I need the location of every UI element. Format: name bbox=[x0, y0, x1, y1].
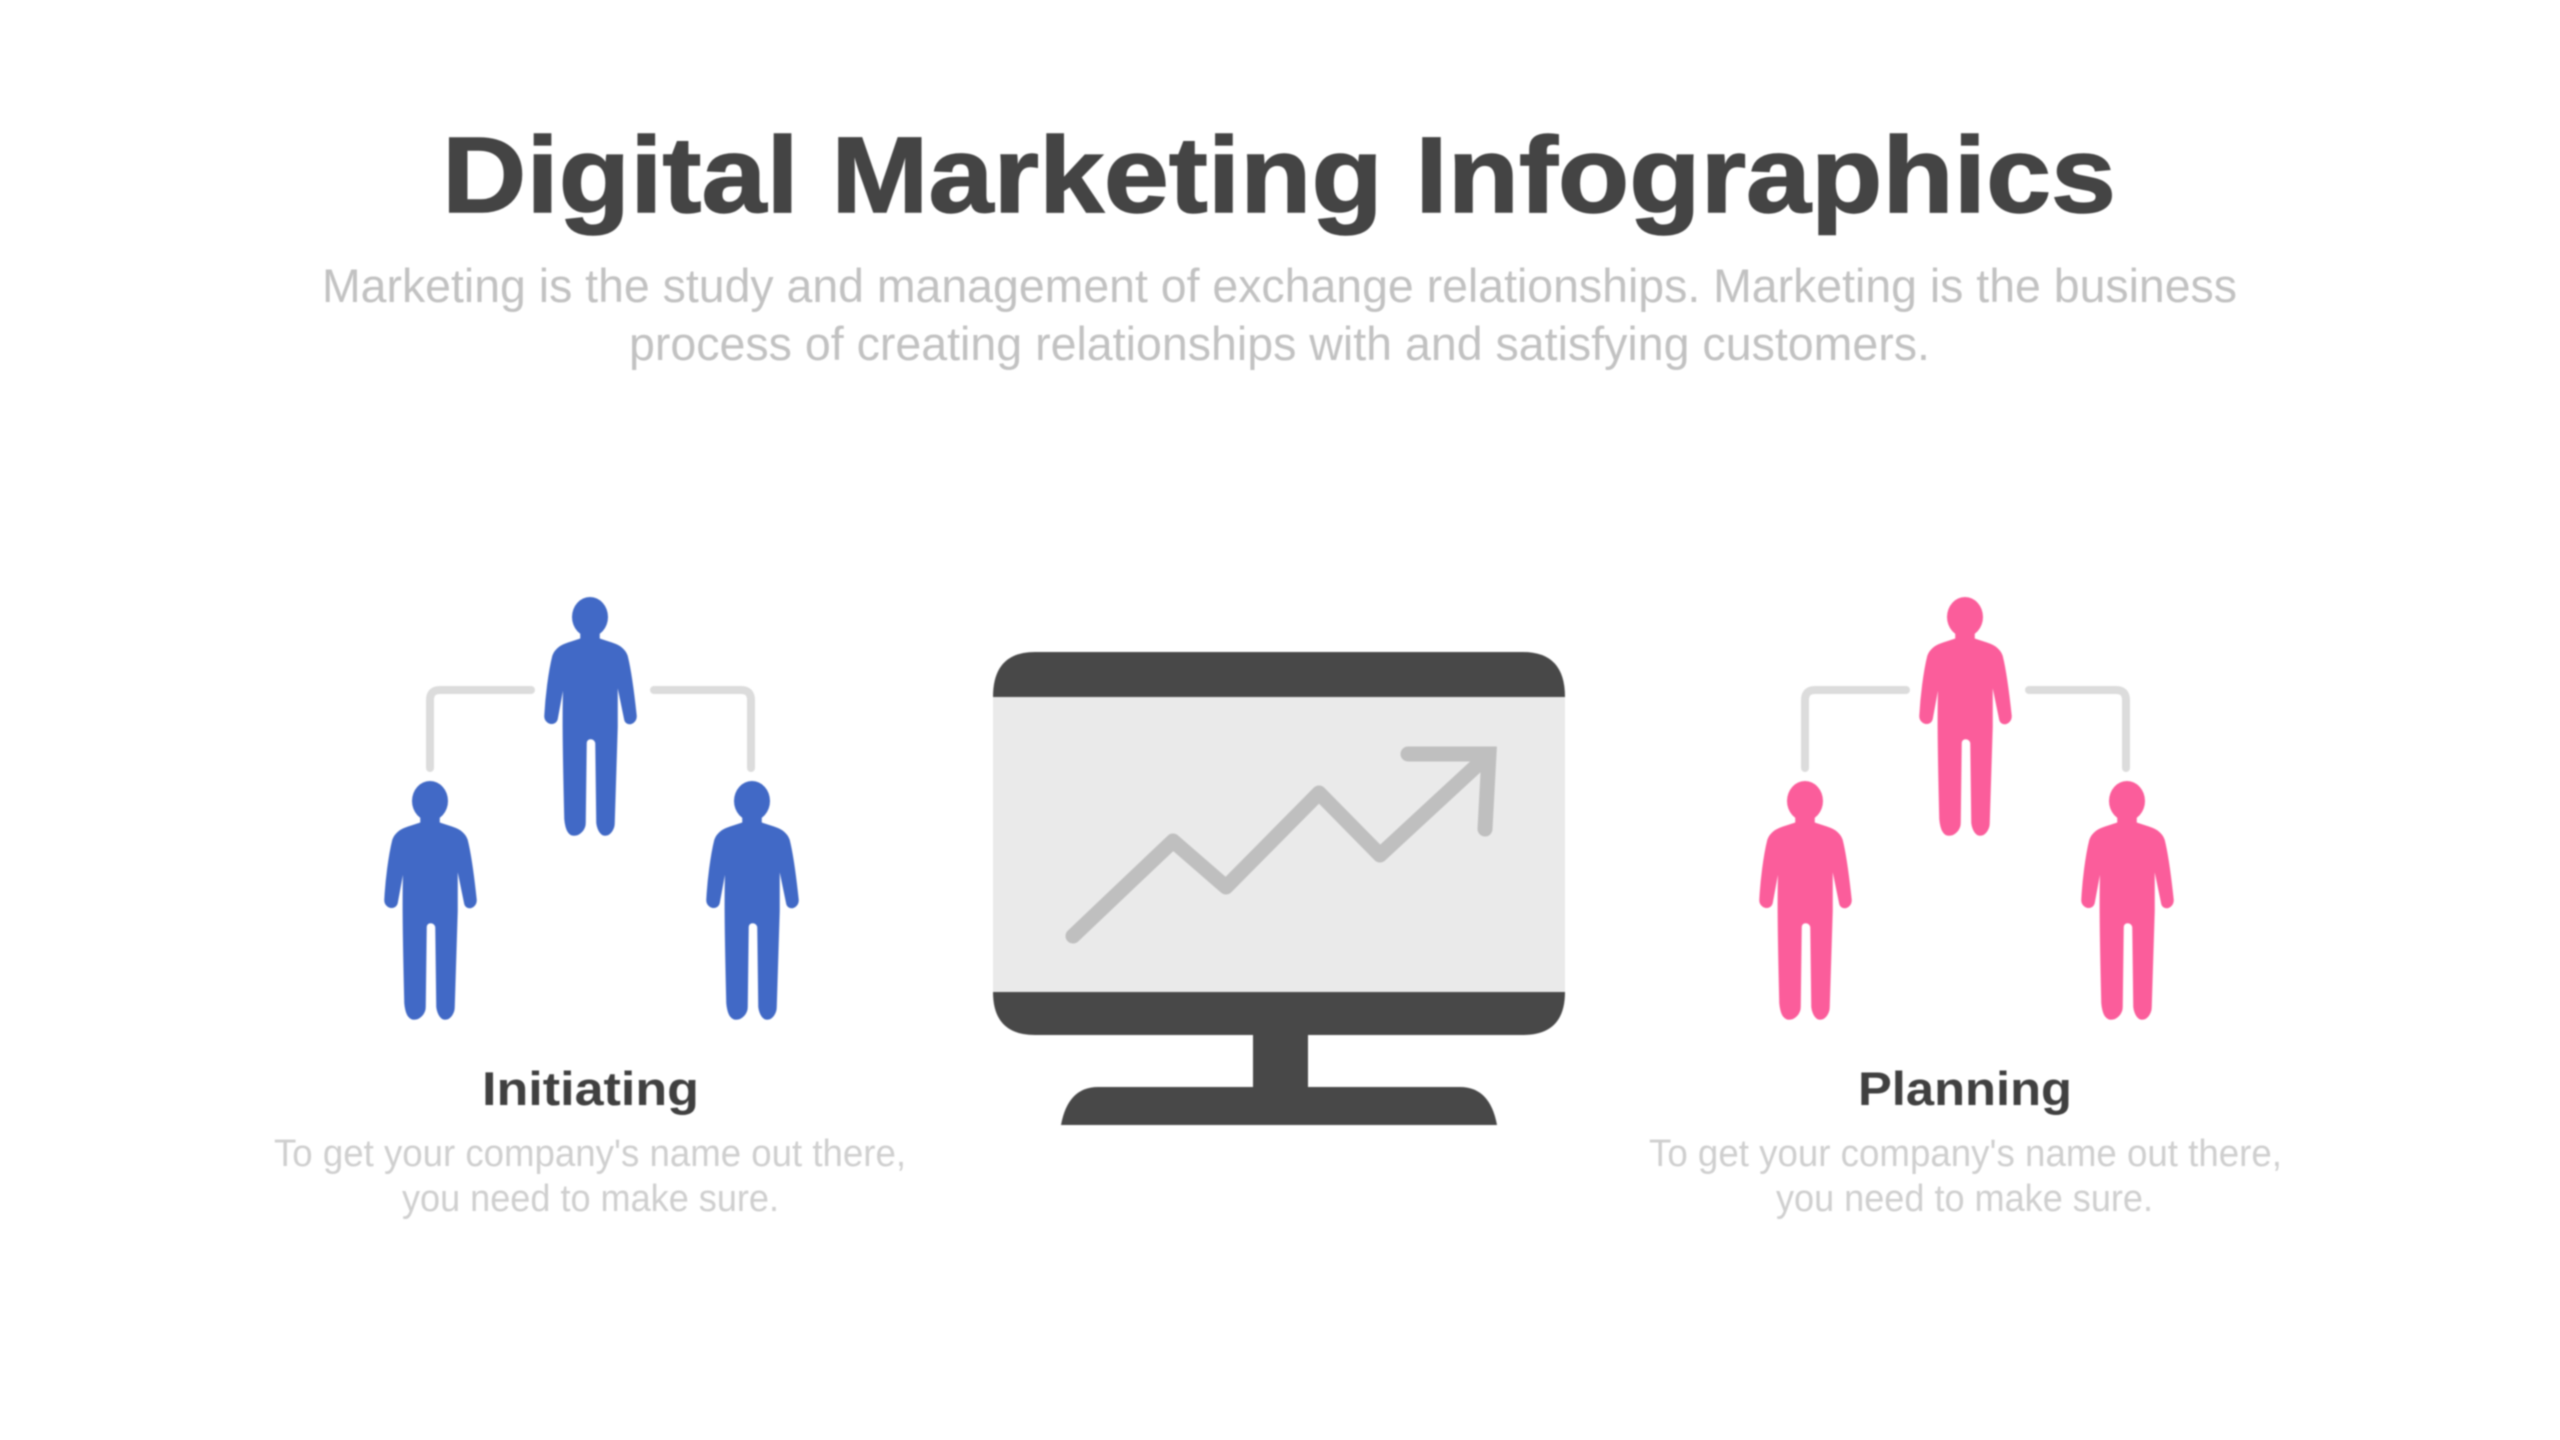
text: planning description bbox=[1649, 1133, 2282, 1220]
text: initiating description: To get your company's name out there, bbox=[274, 1133, 906, 1175]
panel: planning bbox=[1649, 597, 2282, 1220]
heading: initiating: Initiating bbox=[482, 1062, 699, 1115]
subtitle: Marketing is the study and management of exchange relationships. Marketing is the business bbox=[322, 259, 2237, 312]
text: initiating description: you need to make sure. bbox=[402, 1178, 779, 1220]
title: Digital Marketing Infographics bbox=[442, 114, 2116, 235]
icon: blue people bbox=[385, 597, 798, 1019]
icon: pink people bbox=[1760, 597, 2173, 1019]
subtitle bbox=[322, 259, 2237, 370]
text: planning description: you need to make sure. bbox=[1776, 1178, 2153, 1220]
panel: initiating bbox=[274, 597, 906, 1220]
text: planning description: To get your company's name out there, bbox=[1649, 1133, 2282, 1175]
growth arrow bbox=[1073, 754, 1489, 936]
connector lines: blue group bbox=[430, 690, 751, 768]
subtitle: process of creating relationships with and satisfying customers. bbox=[629, 317, 1930, 370]
connector lines: pink group bbox=[1805, 690, 2126, 768]
icon: monitor with growth chart bbox=[993, 652, 1565, 1125]
text: initiating description bbox=[274, 1133, 906, 1220]
heading: planning: Planning bbox=[1858, 1062, 2072, 1115]
